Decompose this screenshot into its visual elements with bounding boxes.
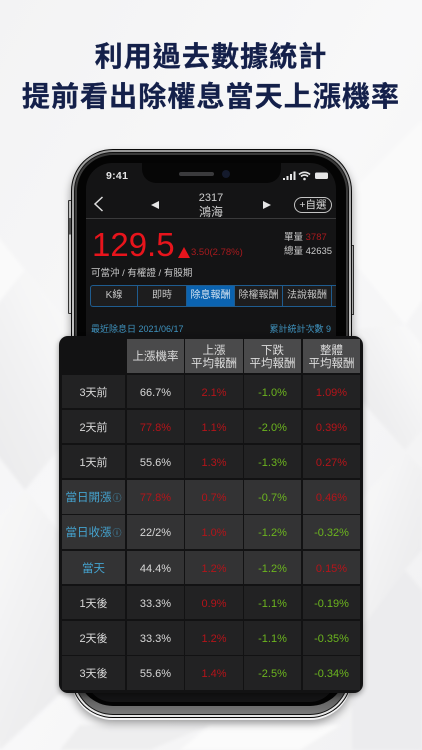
tab bar: K線 — [106, 290, 122, 301]
header: 整體平均報酬 — [303, 339, 360, 373]
row: 3天前: 1.09% — [316, 386, 347, 398]
row: 當日開漲: 當日開漲 — [65, 492, 111, 504]
row: 當日收漲: 當日收漲 — [65, 527, 111, 539]
previous arrow — [151, 201, 159, 209]
title: 利用過去數據統計 — [95, 41, 327, 72]
volume: 總量 42635 — [284, 246, 332, 257]
row: 3天前: 66.7% — [140, 386, 171, 398]
row: 當天: 0.15% — [316, 562, 347, 574]
row: 當天: 44.4% — [140, 562, 171, 574]
row: 1天後: 1天後 — [79, 598, 108, 610]
row: 當天: -1.2% — [258, 562, 287, 574]
title — [22, 41, 400, 112]
header: 上漲平均報酬 — [185, 339, 243, 373]
row: 3天後: 1.4% — [201, 668, 227, 680]
nav divider — [86, 218, 336, 219]
phone — [65, 148, 358, 729]
row: 2天後: -0.35% — [314, 633, 349, 645]
row: 當日開漲: 0.46% — [316, 492, 347, 504]
cumulative count: 累計統計次數 9 — [269, 324, 331, 334]
row: 3天後: -2.5% — [258, 668, 287, 680]
row: 1天後 — [62, 586, 360, 619]
header: 下跌平均報酬: 下跌 — [261, 344, 284, 356]
header: 上漲平均報酬: 平均報酬 — [191, 358, 237, 370]
status icons — [283, 172, 328, 180]
row: 1天前 — [62, 445, 360, 478]
row: 當天 — [62, 551, 360, 584]
row: 當日收漲: ⓘ — [112, 528, 122, 538]
row: 當日開漲 — [62, 480, 360, 514]
row: 3天前: 2.1% — [201, 386, 227, 398]
row: 1天後: 0.9% — [201, 598, 227, 610]
header: 上漲機率 — [127, 339, 184, 373]
row: 2天前: 0.39% — [316, 422, 347, 434]
tab bar — [90, 285, 336, 307]
row: 3天後: 3天後 — [79, 668, 108, 680]
notch — [142, 161, 281, 183]
tab bar: 除息報酬 — [190, 290, 230, 301]
row: 當日收漲: -1.2% — [258, 527, 287, 539]
camera — [222, 170, 230, 178]
row: 3天後: 55.6% — [140, 668, 171, 680]
price: 129.5 — [92, 226, 175, 263]
stock code and name: 鴻海 — [199, 205, 223, 219]
row: 當日開漲: 77.8% — [140, 492, 171, 504]
header: 上漲機率: 上漲機率 — [132, 351, 178, 363]
row: 3天前: 3天前 — [79, 386, 108, 398]
table panel — [59, 336, 363, 693]
row: 1天後: -0.19% — [314, 598, 349, 610]
back arrow — [94, 196, 103, 212]
row: 1天後: 33.3% — [140, 598, 171, 610]
volume: 單量 3787 — [284, 232, 327, 243]
price change: 3.50(2.78%) — [191, 247, 243, 258]
header: 下跌平均報酬: 平均報酬 — [250, 358, 296, 370]
speaker — [179, 172, 214, 176]
row: 3天後: -0.34% — [314, 668, 349, 680]
row: 當天: 當天 — [82, 562, 105, 574]
row: 當日收漲: 1.0% — [201, 527, 227, 539]
row: 當日收漲: 22/2% — [140, 527, 171, 539]
screen — [86, 163, 336, 702]
row: 2天後: 1.2% — [201, 633, 227, 645]
tab bar: 除權報酬 — [238, 290, 278, 301]
row: 1天前: 0.27% — [316, 456, 347, 468]
row: 當日開漲: 0.7% — [201, 492, 227, 504]
row: 2天前: 1.1% — [201, 422, 227, 434]
time: 9:41 — [106, 170, 128, 182]
row: 3天後 — [62, 656, 360, 690]
row: 當天: 1.2% — [201, 562, 227, 574]
header: 整體平均報酬: 平均報酬 — [308, 358, 354, 370]
row: 2天前 — [62, 410, 360, 443]
phone metal ring — [72, 150, 351, 717]
volume — [284, 232, 332, 257]
row: 1天前: -1.3% — [258, 456, 287, 468]
row: 2天後: 33.3% — [140, 633, 171, 645]
next arrow — [263, 201, 271, 209]
header: 上漲平均報酬: 上漲 — [202, 344, 226, 356]
row: 2天後: -1.1% — [258, 633, 287, 645]
stock code and name — [199, 192, 223, 219]
row: 1天前: 55.6% — [140, 456, 171, 468]
header: 下跌平均報酬 — [244, 339, 301, 373]
right side button — [350, 245, 354, 315]
row: 1天後: -1.1% — [258, 598, 287, 610]
row: 當日收漲 — [62, 515, 360, 549]
up triangle — [178, 247, 190, 258]
add to watchlist button: +自選 — [299, 199, 327, 211]
tab bar: 法說報酬 — [287, 290, 327, 301]
row: 當日開漲: -0.7% — [258, 492, 287, 504]
row: 1天前: 1.3% — [201, 456, 227, 468]
title: 提前看出除權息當天上漲機率 — [22, 81, 400, 112]
row: 1天前: 1天前 — [79, 456, 108, 468]
phone grey bezel band — [75, 153, 348, 714]
phone inner ring — [74, 152, 349, 715]
stock code and name: 2317 — [199, 192, 223, 204]
add to watchlist button — [294, 197, 332, 213]
attributes: 可當沖 / 有權證 / 有股期 — [91, 268, 192, 279]
row: 2天前: -2.0% — [258, 422, 287, 434]
row: 3天前 — [62, 375, 360, 408]
row: 2天前: 77.8% — [140, 422, 171, 434]
row: 當日開漲: ⓘ — [112, 493, 122, 503]
row: 2天後: 2天後 — [79, 633, 108, 645]
row: 3天前: -1.0% — [258, 386, 287, 398]
tab bar: 即時 — [152, 290, 172, 301]
bezel — [77, 155, 346, 706]
row: 2天前: 2天前 — [79, 422, 108, 434]
row: 當日收漲: -0.32% — [314, 527, 349, 539]
phone shadow — [71, 151, 352, 720]
recent ex-dividend date: 最近除息日 2021/06/17 — [91, 324, 184, 334]
row: 2天後 — [62, 621, 360, 655]
header: 整體平均報酬: 整體 — [320, 344, 343, 356]
phone frame — [71, 149, 352, 718]
left side buttons — [68, 200, 73, 314]
